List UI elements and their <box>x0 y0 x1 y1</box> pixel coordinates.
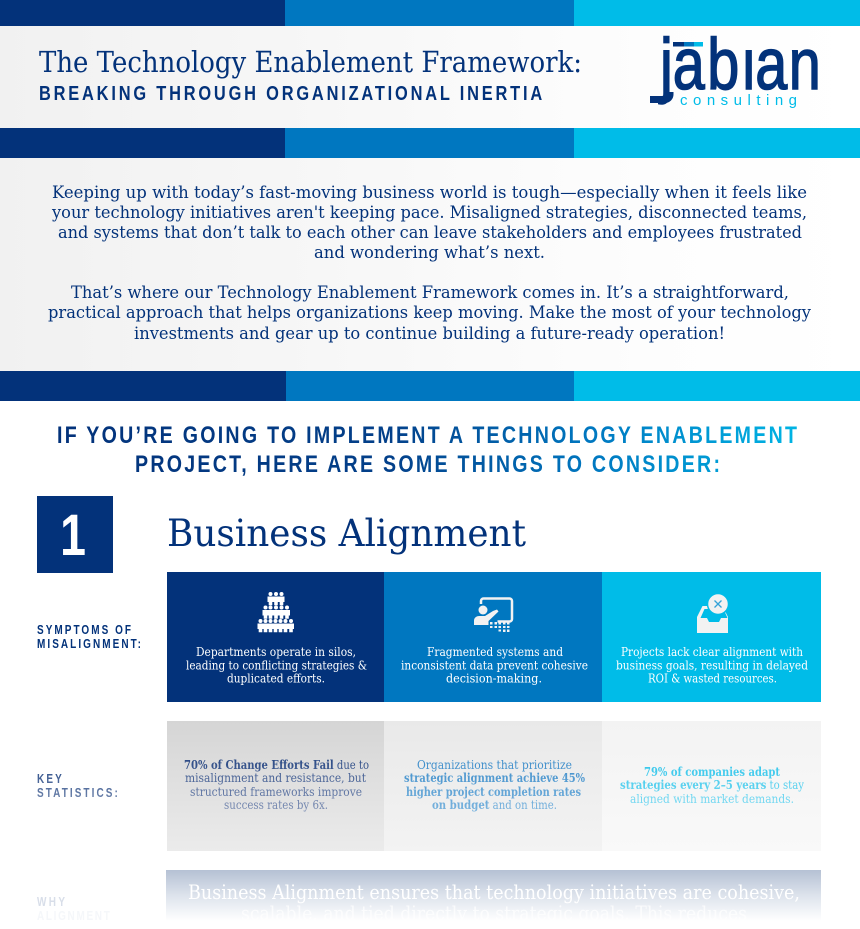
symptom text 1: duplicated efforts. <box>227 670 325 686</box>
intro paragraph 2: That’s where our Technology Enablement Framework comes in. It’s a straightforward, <box>71 283 789 302</box>
statistic card 3: 79% of companies adapt <box>644 764 780 779</box>
statistic card 1: 70% of Change Efforts Fail due to <box>184 757 369 772</box>
statistic card 3 <box>602 721 821 851</box>
second colour bar <box>0 128 860 158</box>
intro paragraph 1 <box>51 183 807 262</box>
icon: inbox with x <box>697 594 728 633</box>
icon: people pyramid <box>258 592 294 632</box>
why alignment banner (faded): Business Alignment ensures that technology initiatives are cohesive, <box>188 881 800 904</box>
statistic card 2: on budget and on time. <box>432 797 557 812</box>
label: symptoms of misalignment: SYMPTOMS OF <box>37 624 131 637</box>
intro paragraph 2 <box>48 283 812 343</box>
icon: presenter at board <box>474 598 512 632</box>
logo: Jabian Consulting: jabıan <box>658 24 821 104</box>
symptom text 2 <box>401 644 588 686</box>
label: why alignment (faded): WHY <box>37 896 65 909</box>
statistic card 2: strategic alignment achieve 45% <box>404 770 585 785</box>
intro paragraph 2: investments and gear up to continue building a future-ready operation! <box>134 324 725 343</box>
logo: Jabian Consulting: consulting <box>680 92 797 109</box>
label: why alignment (faded): ALIGNMENT <box>37 910 110 923</box>
section title: Business Alignment: Business Alignment <box>167 512 526 555</box>
label: why alignment (faded) <box>37 896 110 923</box>
symptom card 1 <box>167 572 384 702</box>
statistic card 1: misalignment and resistance, but <box>185 770 366 785</box>
intro paragraph 2: practical approach that helps organizations keep moving. Make the most of your technology <box>48 303 812 322</box>
section heading: PROJECT, HERE ARE SOME THINGS TO CONSIDER: <box>135 450 720 478</box>
symptom text 1: leading to conflicting strategies & <box>186 658 367 672</box>
statistic card 3: strategies every 2–5 years to stay <box>620 777 805 792</box>
intro paragraph 1: your technology initiatives aren't keeping pace. Misaligned strategies, disconnected teams, <box>51 203 807 222</box>
why alignment banner (faded): scalable, and tied directly to strategic goals. This reduces <box>241 902 747 925</box>
statistic card 2: higher project completion rates <box>406 784 581 799</box>
symptom text 2: decision-making. <box>446 670 542 686</box>
symptom text 2: inconsistent data prevent cohesive <box>401 658 588 672</box>
symptom card 2 <box>384 572 602 702</box>
section heading <box>57 421 797 478</box>
label: key statistics: KEY <box>37 773 62 786</box>
statistic card 2 <box>384 721 602 851</box>
intro paragraph 1: Keeping up with today’s fast-moving business world is tough—especially when it feels like <box>52 183 807 202</box>
symptom text 1: Departments operate in silos, <box>196 644 356 659</box>
title: The Technology Enablement Framework: <box>39 45 582 79</box>
symptom text 2: Fragmented systems and <box>427 644 563 659</box>
statistic card 1 <box>167 721 384 851</box>
label: symptoms of misalignment: MISALIGNMENT: <box>37 638 141 651</box>
symptom text 3 <box>616 644 808 686</box>
symptom text 3: business goals, resulting in delayed <box>616 658 808 672</box>
symptom text 3: ROI & wasted resources. <box>648 670 777 686</box>
header panel <box>0 26 860 128</box>
subtitle: BREAKING THROUGH ORGANIZATIONAL INERTIA <box>39 81 542 104</box>
statistic card 1: structured frameworks improve <box>190 784 362 799</box>
symptom card 3 <box>602 572 821 702</box>
intro panel <box>0 158 860 371</box>
label: symptoms of misalignment <box>37 624 141 651</box>
symptom text 3: Projects lack clear alignment with <box>621 644 803 659</box>
statistic card 2: Organizations that prioritize <box>417 757 572 772</box>
label: key statistics: STATISTICS: <box>37 787 118 800</box>
top colour bar <box>0 0 860 26</box>
third colour bar <box>0 371 860 401</box>
statistic card 3: aligned with market demands. <box>630 791 794 806</box>
label: key statistics <box>37 773 118 800</box>
symptom text 1 <box>186 644 367 686</box>
intro paragraph 1: and wondering what’s next. <box>314 243 545 262</box>
number badge: 1 <box>60 503 86 568</box>
statistic card 1: success rates by 6x. <box>224 797 328 812</box>
section heading: IF YOU’RE GOING TO IMPLEMENT A TECHNOLOGY ENABLEMENT <box>57 421 797 449</box>
number badge <box>37 496 113 573</box>
why alignment banner (faded) <box>166 870 821 925</box>
intro paragraph 1: and systems that don’t talk to each other can leave stakeholders and employees frustrated <box>58 223 802 242</box>
